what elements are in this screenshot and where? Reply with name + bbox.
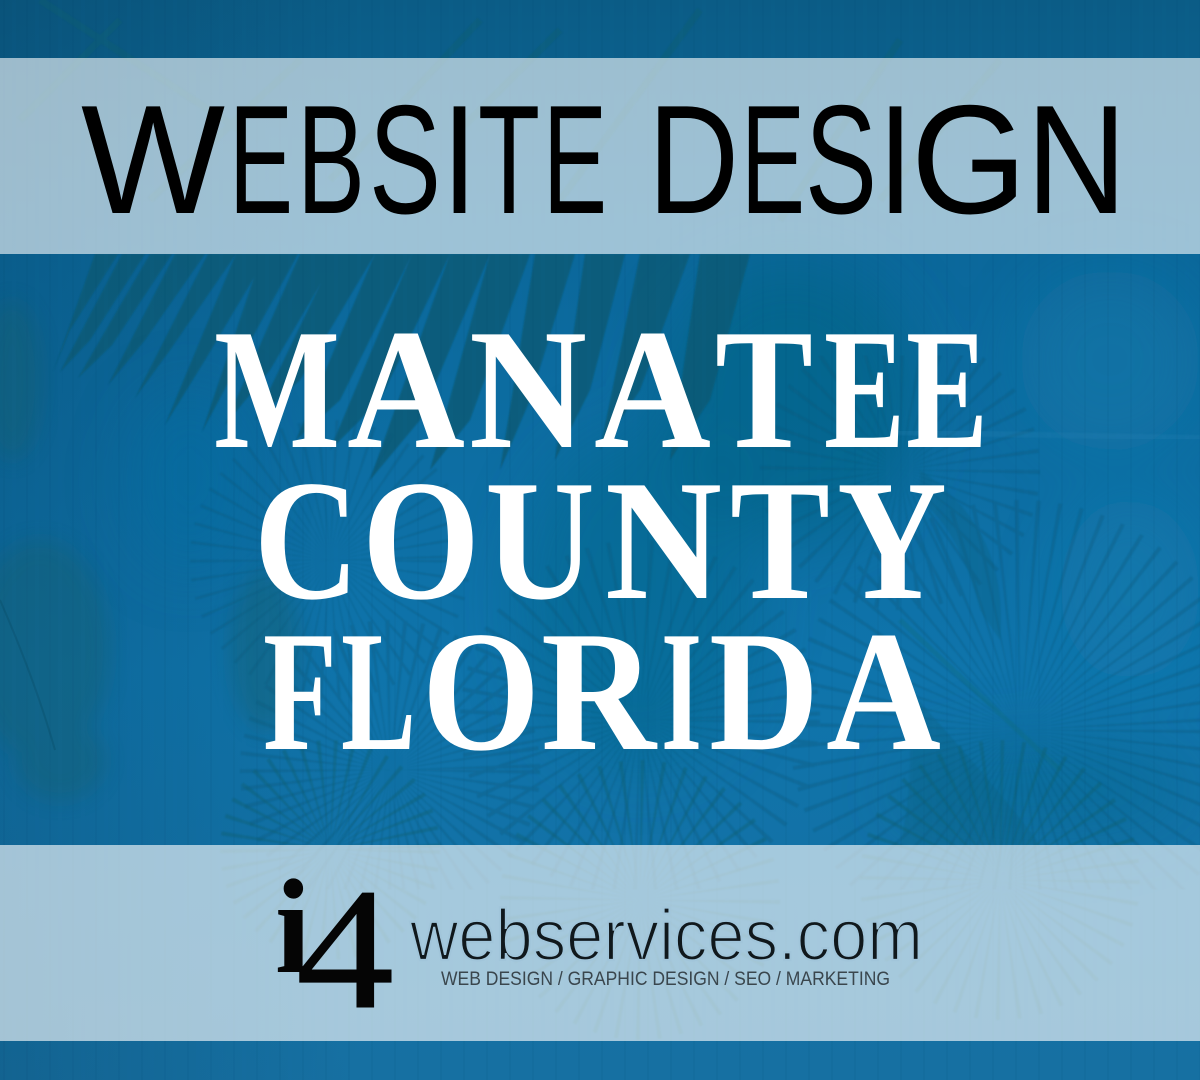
heading: website design: T	[478, 73, 540, 246]
title line: County: T	[730, 446, 830, 636]
title line: Florida: O	[422, 597, 540, 787]
top band	[0, 58, 1200, 254]
title line: County: N	[605, 446, 722, 636]
logo tagline: WEB DESIGN / GRAPHIC DESIGN / SEO / MARKETING	[441, 969, 890, 990]
title line: Manatee: A	[347, 295, 465, 485]
heading: website design: I	[878, 73, 913, 246]
title line: Manatee: E	[824, 295, 905, 485]
title line: Manatee: N	[469, 295, 587, 485]
top left hanging fronds	[53, 254, 750, 480]
title line: Manatee: E	[906, 295, 988, 485]
logo mark: i4: 4	[296, 854, 394, 1045]
title line: Florida: R	[541, 597, 658, 787]
palm leaflet fans	[260, 400, 1135, 845]
heading: website design: E	[741, 73, 805, 246]
heading: website design: G	[911, 73, 1027, 246]
title line: Florida: F	[263, 597, 337, 787]
heading: website design: N	[1026, 73, 1127, 246]
title line: Manatee: T	[715, 295, 813, 485]
large palm stems	[900, 470, 1040, 845]
title line: County: O	[362, 446, 480, 636]
title line: Florida: A	[826, 597, 941, 787]
heading: website design: B	[297, 73, 365, 246]
logo wordmark: webservices.com	[409, 896, 923, 976]
title line: County: U	[485, 446, 595, 636]
heading: website design: E	[543, 73, 607, 246]
logo: i4 webservices.com	[275, 853, 923, 1045]
title line: Florida: D	[709, 597, 819, 787]
faint trees on the left side	[0, 300, 300, 800]
title line: Florida: L	[341, 597, 416, 787]
title line: Manatee: A	[594, 295, 711, 485]
title line: County: C	[254, 446, 359, 636]
heading: website design: I	[442, 73, 477, 246]
title line: Manatee: M	[214, 295, 340, 485]
fronds visible in top strip and through the bands	[20, 0, 1070, 970]
title line: County: Y	[837, 446, 947, 636]
heading: website design: S	[369, 73, 441, 246]
logo mark: i4: i	[275, 853, 311, 1002]
title: Manatee County Florida	[214, 295, 988, 787]
soft dark and light masses	[130, 260, 1200, 840]
heading: website design: S	[805, 73, 877, 246]
title line: Florida: I	[661, 597, 702, 787]
heading: website design: D	[648, 73, 739, 246]
heading: website design: E	[229, 73, 293, 246]
heading: website design: W	[81, 73, 225, 246]
bottom band	[0, 845, 1200, 1041]
